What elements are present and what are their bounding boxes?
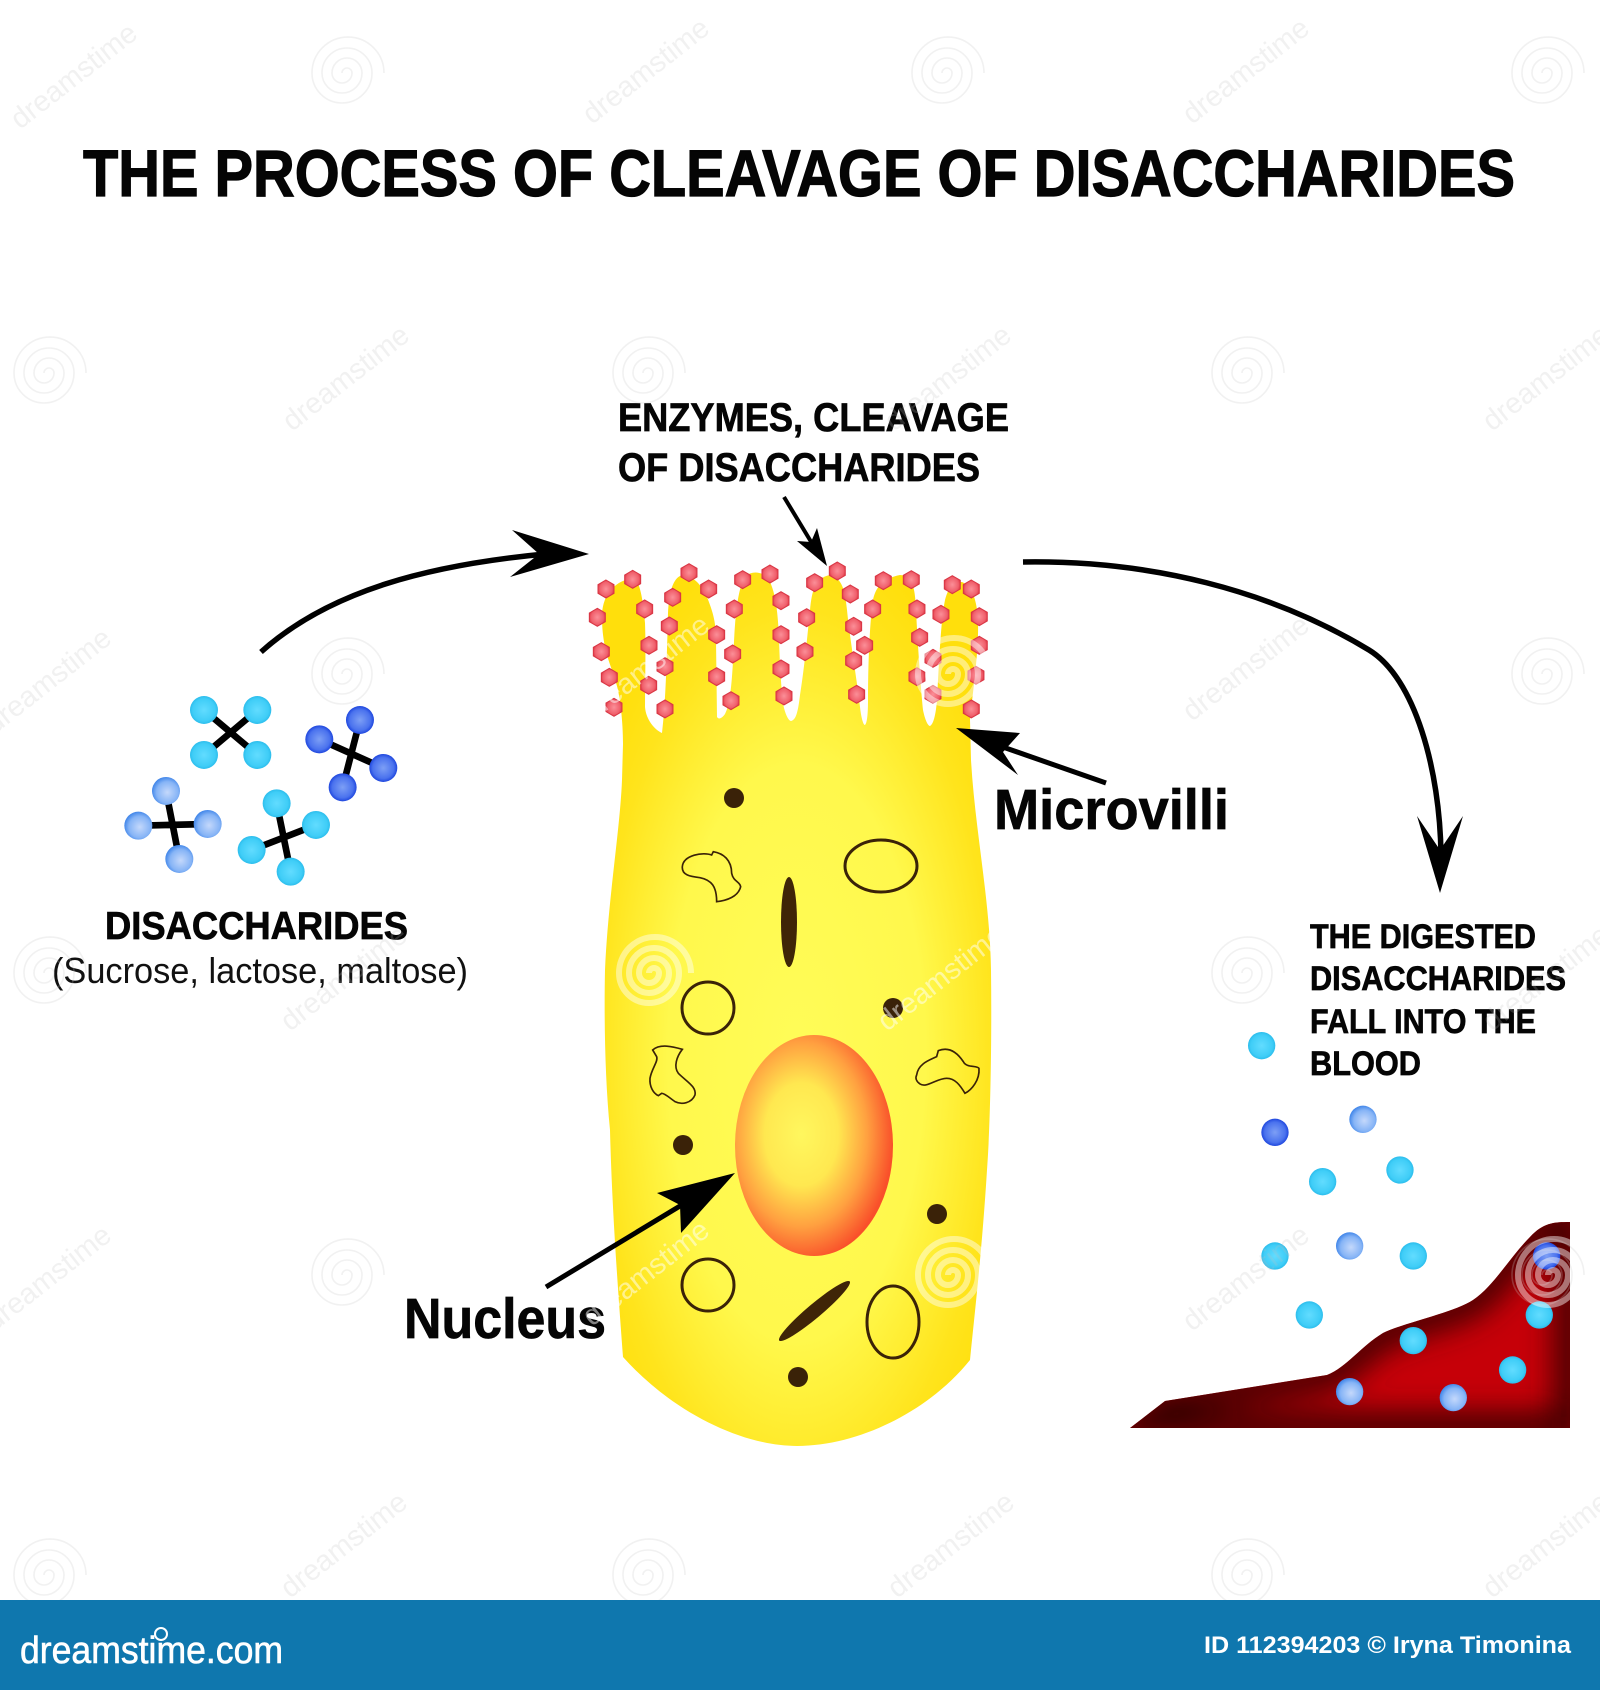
watermark overlay: dreamstime <box>275 919 414 1038</box>
label: digested disaccharides: DISACCHARIDES <box>1310 960 1566 998</box>
arrow: nucleus <box>546 1173 735 1287</box>
molecules: disaccharides <box>124 696 397 886</box>
watermark overlay: dreamstime <box>879 319 1018 438</box>
molecule 1 <box>190 696 271 769</box>
label: disaccharides: (Sucrose, lactose, maltose) <box>52 950 468 991</box>
cell with microvilli <box>602 573 991 1446</box>
watermark overlay: dreamstime <box>882 1486 1021 1605</box>
label: digested disaccharides <box>1310 918 1566 1083</box>
watermark overlay: dreamstime <box>277 319 416 438</box>
arrow: cell to blood <box>1023 562 1463 893</box>
label: nucleus: Nucleus <box>404 1287 606 1351</box>
molecule 2 <box>305 706 397 801</box>
molecules: monosaccharides falling into blood <box>1248 1032 1560 1411</box>
label: enzymes <box>618 396 1009 490</box>
footer credit: ID 112394203 © Iryna Timonina <box>1204 1632 1572 1659</box>
watermark overlay: dreamstime <box>577 1214 716 1333</box>
label: digested disaccharides: FALL INTO THE <box>1310 1003 1536 1041</box>
arrow: to enzymes <box>784 497 827 566</box>
label: enzymes: OF DISACCHARIDES <box>618 446 980 490</box>
label: disaccharides: DISACCHARIDES <box>105 905 408 948</box>
label: digested disaccharides: BLOOD <box>1310 1045 1421 1083</box>
footer logo: dreamstime.com <box>20 1630 283 1672</box>
molecule 4 <box>238 789 330 886</box>
enzymes on microvilli <box>589 562 987 718</box>
watermark overlay: dreamstime <box>1177 609 1316 728</box>
nucleus <box>735 1035 893 1256</box>
label: microvilli: Microvilli <box>994 778 1229 842</box>
watermark overlay: dreamstime <box>275 1486 414 1605</box>
watermark overlay: dreamstime <box>1177 12 1316 131</box>
blood vessel <box>1130 1222 1570 1428</box>
watermark overlay: dreamstime <box>1177 1219 1316 1338</box>
molecule 3 <box>124 777 222 873</box>
label: disaccharides <box>52 905 468 991</box>
organelles <box>650 788 979 1387</box>
watermark overlay: dreamstime <box>577 12 716 131</box>
label: enzymes: ENZYMES, CLEAVAGE <box>618 396 1009 440</box>
footer bar <box>0 1600 1600 1690</box>
arrow: disaccharides to cell <box>261 530 589 652</box>
label: digested disaccharides: THE DIGESTED <box>1310 918 1536 956</box>
watermark overlay: dreamstime <box>872 919 1011 1038</box>
watermark overlay: dreamstime <box>5 17 144 136</box>
arrow: microvilli <box>956 728 1106 783</box>
watermark overlay: dreamstime <box>577 609 716 728</box>
